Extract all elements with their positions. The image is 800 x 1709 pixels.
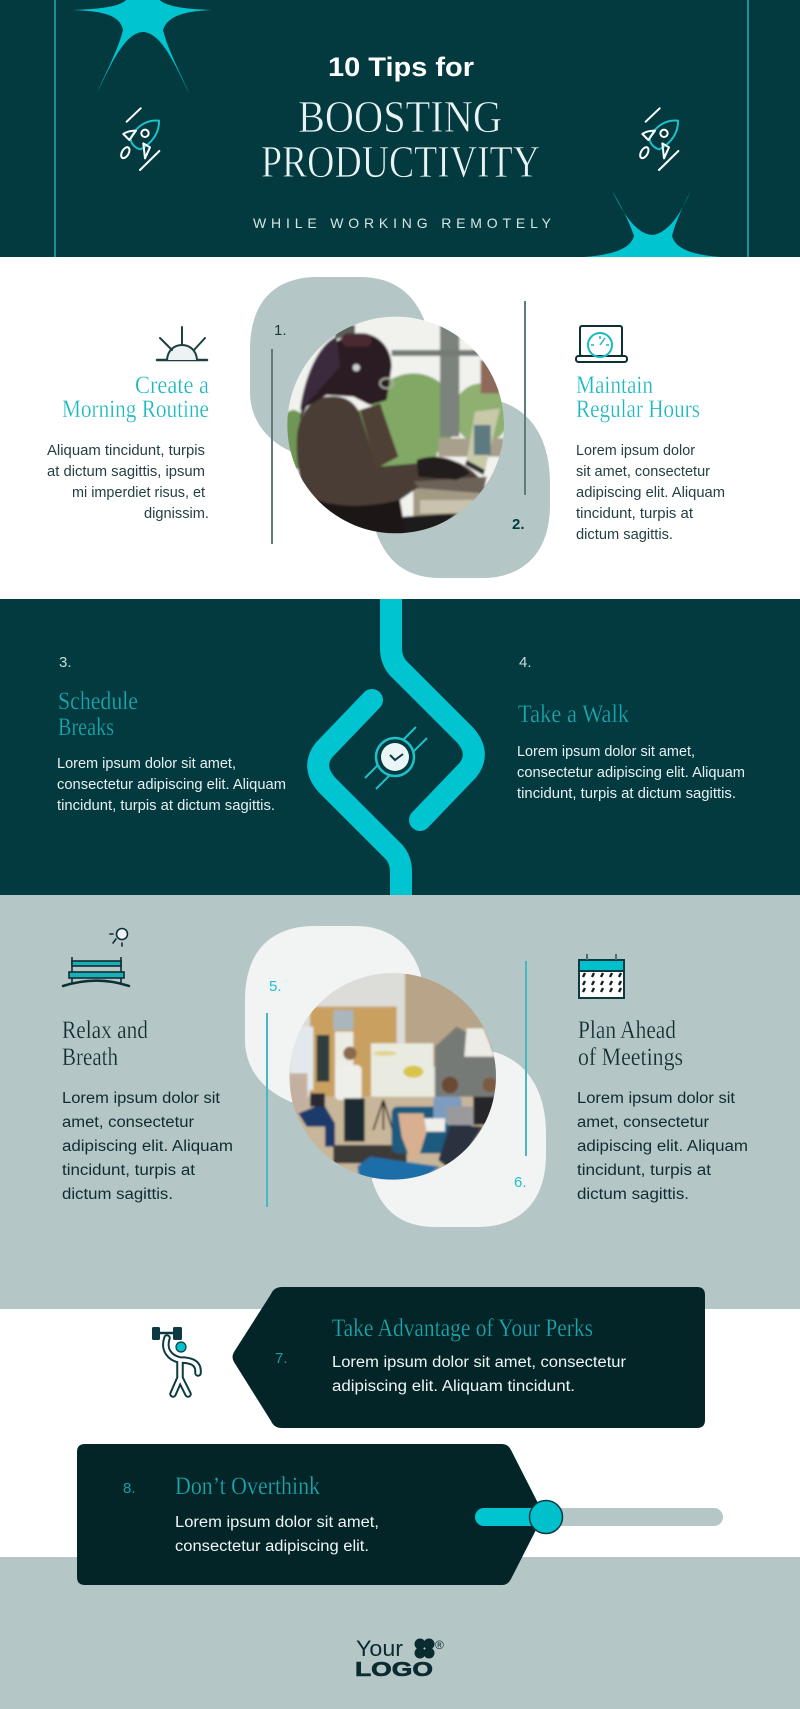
heading: maintain regular hours: Maintain — [576, 372, 653, 399]
blob: tip 1 — [250, 277, 425, 452]
heading: schedule breaks: Schedule — [58, 688, 138, 715]
icon: rocket left — [119, 108, 159, 170]
divider line right — [525, 961, 527, 1156]
heading: relax and breath: Relax and — [62, 1017, 148, 1044]
card: tip 8 — [77, 1444, 543, 1585]
blob: tip 5 — [245, 926, 421, 1102]
slider — [475, 1500, 723, 1534]
icon: sunrise — [157, 327, 207, 360]
number 5: 5. — [269, 978, 282, 995]
text: tip 3 body: tincidunt, turpis at dictum sagittis. — [57, 798, 275, 814]
text: tip 5 body — [62, 1090, 233, 1203]
panel: header — [0, 0, 800, 257]
number 1: 1. — [274, 322, 287, 339]
number 4: 4. — [519, 654, 532, 671]
logo — [355, 1636, 444, 1681]
text: tip 6 body: adipiscing elit. Aliquam — [577, 1138, 748, 1155]
text: tip 7 body: adipiscing elit. Aliquam tincidunt. — [332, 1378, 575, 1395]
heading: relax and breath — [62, 1017, 148, 1071]
heading: plan ahead of meetings — [578, 1017, 683, 1071]
logo: Your — [356, 1636, 403, 1661]
text: tip 4 body: consectetur adipiscing elit. Aliquam — [517, 765, 745, 781]
icon: rocket right — [638, 108, 678, 170]
heading: maintain regular hours: Regular Hours — [576, 396, 700, 423]
text: tip 4 body — [517, 744, 745, 802]
divider line left — [271, 349, 273, 544]
text: tip 3 body: consectetur adipiscing elit. Aliquam — [57, 777, 286, 793]
photo: team meeting — [287, 970, 503, 1183]
title: productivity: PRODUCTIVITY — [261, 137, 540, 187]
heading: create a morning routine: Morning Routine — [62, 396, 209, 423]
text: tip 2 body: adipiscing elit. Aliquam — [576, 485, 725, 501]
text: tip 1 body: dignissim. — [144, 506, 209, 522]
blob: tip 6 — [372, 1050, 546, 1227]
icon: star bottom right — [584, 190, 720, 257]
heading: take advantage of your perks: Take Advantage of Your Perks — [332, 1315, 593, 1342]
text: tip 2 body: Lorem ipsum dolor — [576, 443, 695, 459]
text: tip 3 body — [57, 756, 286, 814]
heading: schedule breaks: Breaks — [58, 714, 114, 741]
text: tip 2 body: dictum sagittis. — [576, 527, 673, 543]
logo: ® — [435, 1638, 444, 1652]
text: tip 5 body: Lorem ipsum dolor sit — [62, 1090, 221, 1107]
heading: relax and breath: Breath — [62, 1044, 118, 1071]
logo: LOGO — [355, 1659, 433, 1681]
text: tip 6 body — [577, 1090, 748, 1203]
title: 10 tips for: 10 Tips for — [328, 52, 475, 82]
heading: dont overthink: Don’t Overthink — [175, 1473, 320, 1500]
divider line right — [524, 301, 526, 495]
text: tip 4 body: Lorem ipsum dolor sit amet, — [517, 744, 695, 760]
icon: laptop gauge — [576, 326, 627, 362]
number 6: 6. — [514, 1174, 527, 1191]
text: tip 8 body — [175, 1514, 379, 1555]
number 3: 3. — [59, 654, 72, 671]
text: tip 8 body: Lorem ipsum dolor sit amet, — [175, 1514, 379, 1531]
icon: star top left — [72, 0, 212, 93]
heading: schedule breaks — [58, 688, 138, 741]
heading: create a morning routine: Create a — [135, 372, 209, 399]
text: tip 1 body — [47, 443, 209, 522]
text: tip 7 body: Lorem ipsum dolor sit amet, consectetur — [332, 1354, 626, 1371]
text: tip 2 body: sit amet, consectetur — [576, 464, 710, 480]
text: tip 3 body: Lorem ipsum dolor sit amet, — [57, 756, 236, 772]
text: tip 1 body: mi imperdiet risus, et — [72, 485, 205, 501]
text: tip 2 body — [576, 443, 725, 543]
heading: plan ahead of meetings: Plan Ahead — [578, 1017, 676, 1044]
panel: tips 1 and 2 — [47, 277, 724, 578]
text: tip 1 body: at dictum sagittis, ipsum — [47, 464, 205, 480]
title: boosting: BOOSTING — [298, 92, 502, 142]
panel: tips 3 and 4 — [0, 599, 800, 895]
text: tip 1 body: Aliquam tincidunt, turpis — [47, 443, 205, 459]
icon: watch — [365, 727, 427, 789]
text: tip 6 body: tincidunt, turpis at — [577, 1162, 712, 1179]
ribbon: left path — [318, 700, 401, 915]
number 2: 2. — [512, 516, 525, 533]
text: tip 2 body: tincidunt, turpis at — [576, 506, 693, 522]
heading: plan ahead of meetings: of Meetings — [578, 1044, 683, 1071]
text: tip 7 body — [332, 1354, 626, 1395]
text: tip 4 body: tincidunt, turpis at dictum sagittis. — [517, 786, 736, 802]
text: tip 8 body: consectetur adipiscing elit. — [175, 1538, 369, 1555]
text: tip 6 body: amet, consectetur — [577, 1114, 709, 1131]
panel: white band — [0, 1309, 800, 1557]
icon: bench and sun — [63, 928, 129, 986]
text: tip 5 body: adipiscing elit. Aliquam — [62, 1138, 233, 1155]
subtitle: WHILE WORKING REMOTELY — [253, 215, 552, 231]
photo: woman working on laptop — [287, 316, 504, 534]
heading: create a morning routine — [62, 372, 209, 423]
text: tip 6 body: Lorem ipsum dolor sit — [577, 1090, 736, 1107]
panel: footer band — [0, 1557, 800, 1709]
heading: take a walk: Take a Walk — [518, 701, 629, 728]
text: tip 5 body: amet, consectetur — [62, 1114, 194, 1131]
text: tip 5 body: tincidunt, turpis at — [62, 1162, 196, 1179]
heading: maintain regular hours — [576, 372, 700, 423]
icon: logo clover — [414, 1638, 434, 1658]
divider line left — [266, 1013, 268, 1207]
number 8: 8. — [123, 1480, 136, 1497]
card: tip 7 — [232, 1287, 705, 1428]
ribbon: right path — [391, 580, 474, 820]
number 7: 7. — [275, 1350, 288, 1367]
blob: tip 2 — [376, 400, 550, 578]
text: tip 5 body: dictum sagittis. — [62, 1186, 173, 1203]
icon: calendar — [579, 954, 624, 998]
panel: tips 5 and 6 — [0, 895, 800, 1309]
icon: person lifting dumbbell — [152, 1327, 198, 1394]
text: tip 6 body: dictum sagittis. — [577, 1186, 689, 1203]
